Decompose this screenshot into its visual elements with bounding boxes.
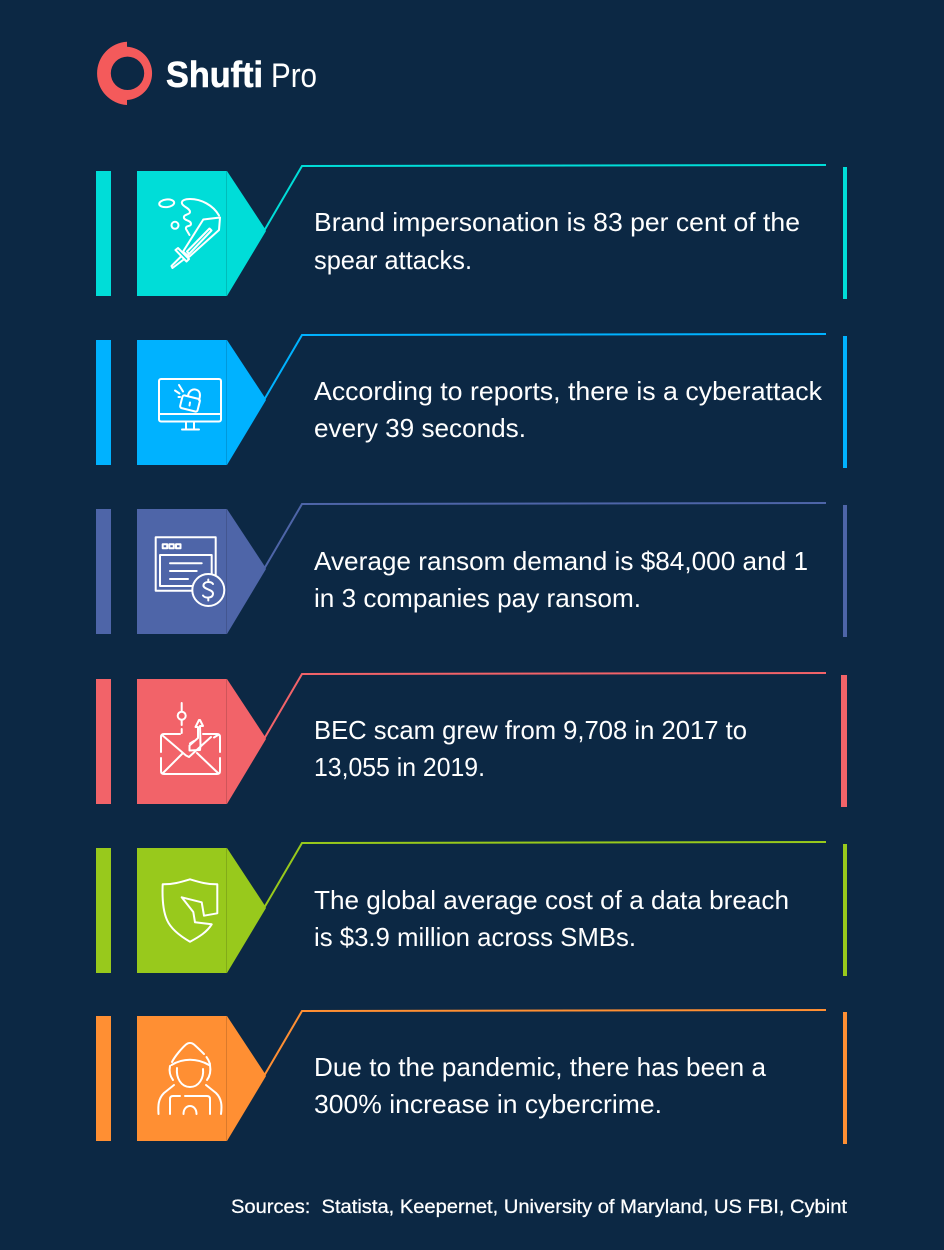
arrow tab (137, 509, 266, 634)
text (314, 546, 808, 613)
right accent bar (843, 1012, 847, 1144)
connector line (264, 503, 826, 569)
left accent bar (96, 509, 111, 634)
text: every 39 seconds. (314, 413, 526, 443)
text: The global average cost of a data breach (314, 885, 789, 915)
right accent bar (843, 505, 847, 637)
panel: brand impersonation (96, 165, 847, 299)
connector line (264, 165, 826, 231)
icon: logo ring (97, 42, 152, 105)
text (314, 1052, 767, 1119)
connector line (264, 842, 826, 908)
logo wordmark: Pro: Pro (271, 57, 317, 95)
text: Brand impersonation is 83 per cent of the (314, 207, 800, 237)
text (314, 207, 800, 275)
text: in 3 companies pay ransom. (314, 583, 641, 613)
icon: hooded hacker (158, 1043, 221, 1114)
arrow tab (137, 171, 266, 296)
panel: ransom demand (96, 503, 847, 637)
icon: browser window with dollar (156, 537, 224, 606)
left accent bar (96, 171, 111, 296)
right accent bar (843, 167, 847, 299)
text: BEC scam grew from 9,708 in 2017 to (314, 715, 747, 745)
right accent bar (843, 844, 847, 976)
panel: pandemic cybercrime (96, 1010, 847, 1144)
icon: monitor with open lock (159, 379, 221, 430)
icon: phishing hook in envelope (161, 703, 220, 774)
text: 13,055 in 2019. (314, 752, 485, 782)
right accent bar (841, 675, 847, 807)
left accent bar (96, 1016, 111, 1141)
left accent bar (96, 679, 111, 804)
arrow tab (137, 848, 266, 973)
text (314, 376, 823, 443)
icon: cracked shield (162, 879, 217, 942)
text: Average ransom demand is $84,000 and 1 (314, 546, 808, 576)
text: According to reports, there is a cyberattack (314, 376, 823, 406)
logo wordmark: Shufti: Shufti (166, 54, 263, 95)
left accent bar (96, 848, 111, 973)
text (314, 885, 789, 952)
text (314, 715, 747, 782)
right accent bar (843, 336, 847, 468)
text: spear attacks. (314, 245, 472, 275)
panel: data breach cost (96, 842, 847, 976)
connector line (264, 1010, 826, 1076)
panel: BEC scam growth (96, 673, 847, 807)
arrow tab (137, 679, 266, 804)
text: Due to the pandemic, there has been a (314, 1052, 767, 1082)
sources footnote: Sources: Statista, Keepernet, University of Maryland, US FBI, Cybint (231, 1197, 848, 1218)
arrow tab (137, 340, 266, 465)
connector line (264, 334, 826, 400)
icon: sword and shield (159, 199, 220, 268)
text: is $3.9 million across SMBs. (314, 922, 636, 952)
text: 300% increase in cybercrime. (314, 1089, 662, 1119)
logo: Shufti Pro (97, 42, 317, 105)
connector line (264, 673, 826, 739)
panel: cyberattack frequency (96, 334, 847, 468)
left accent bar (96, 340, 111, 465)
arrow tab (137, 1016, 266, 1141)
